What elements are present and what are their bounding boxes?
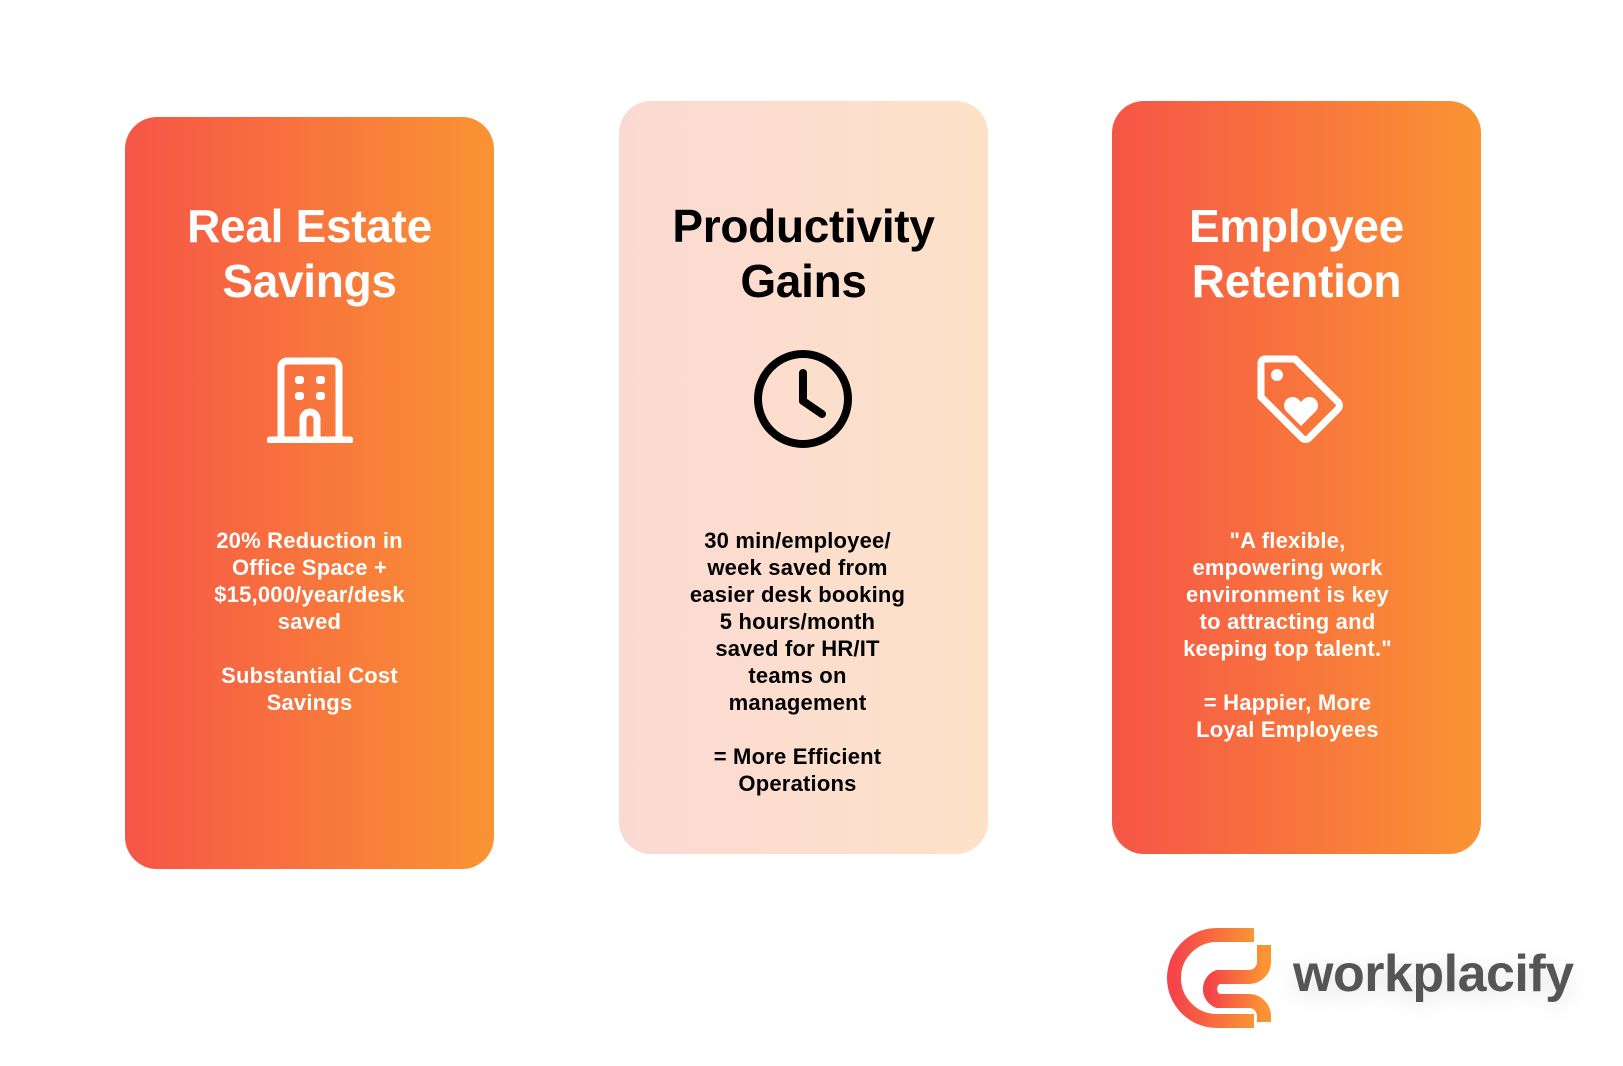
text: card 2 body: = More Efficient <box>714 744 881 769</box>
panel: productivity gains <box>619 101 988 854</box>
heading: Real Estate Savings: Real Estate <box>187 200 432 252</box>
text: card 1 body: Savings <box>267 690 352 715</box>
text: card 3 body: to attracting and <box>1200 609 1375 634</box>
heading: Productivity Gains: Gains <box>740 255 867 307</box>
heading: Productivity Gains: Productivity <box>672 200 935 252</box>
icon: tag with heart <box>1258 356 1343 443</box>
heading: Real Estate Savings <box>187 200 432 307</box>
text: card 3 body: = Happier, More <box>1204 690 1371 715</box>
text: card 1 body: Office Space + <box>232 555 387 580</box>
text: card 1 body: saved <box>278 609 341 634</box>
text: card 3 body <box>1183 528 1392 742</box>
text: card 3 body: "A flexible, <box>1230 528 1345 553</box>
text: card 3 body: environment is key <box>1186 582 1389 607</box>
text: card 1 body: 20% Reduction in <box>216 528 403 553</box>
text: card 2 body: 30 min/employee/ <box>704 528 891 553</box>
icon: logo mark <box>1167 928 1271 1028</box>
text: card 2 body: easier desk booking <box>690 582 905 607</box>
text: card 2 body: management <box>729 690 866 715</box>
text: card 2 body: saved for HR/IT <box>715 636 880 661</box>
heading: Employee Retention: Retention <box>1192 255 1401 307</box>
heading: Real Estate Savings: Savings <box>222 255 397 307</box>
text: card 3 body: empowering work <box>1192 555 1383 580</box>
icon: building <box>267 358 353 443</box>
text: card 2 body: week saved from <box>707 555 888 580</box>
text: card 2 body: teams on <box>748 663 847 688</box>
panel: employee retention <box>1112 101 1481 854</box>
text: card 1 body: Substantial Cost <box>221 663 398 688</box>
panel: real estate savings <box>125 117 494 869</box>
heading: Employee Retention <box>1189 200 1404 307</box>
text: card 2 body: Operations <box>738 771 857 796</box>
text: card 3 body: Loyal Employees <box>1196 717 1379 742</box>
text: card 3 body: keeping top talent." <box>1183 636 1392 661</box>
heading: Productivity Gains <box>672 200 935 307</box>
text: workplacify wordmark: workplacify <box>1293 945 1574 1003</box>
text: card 2 body <box>690 528 905 796</box>
text: card 1 body <box>214 528 405 715</box>
icon: clock <box>754 350 852 448</box>
text: card 2 body: 5 hours/month <box>720 609 875 634</box>
heading: Employee Retention: Employee <box>1189 200 1404 252</box>
logo: workplacify <box>1167 928 1574 1028</box>
text: card 1 body: $15,000/year/desk <box>214 582 405 607</box>
